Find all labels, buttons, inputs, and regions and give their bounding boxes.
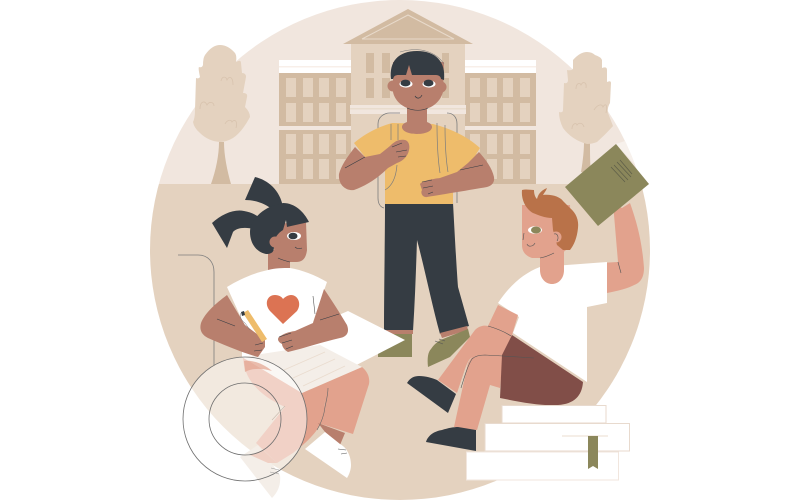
left tree	[193, 45, 250, 184]
neck	[268, 250, 290, 284]
standing boy	[339, 50, 494, 367]
legs and skirt	[243, 350, 369, 478]
back leg	[454, 357, 503, 430]
school building	[279, 9, 536, 184]
left wing	[279, 60, 351, 184]
left arm	[200, 295, 265, 357]
left shoe	[378, 330, 413, 357]
trousers	[384, 203, 469, 334]
backpack outline	[378, 113, 457, 208]
raised arm	[600, 203, 644, 294]
white shoe	[305, 432, 351, 478]
paper	[242, 311, 405, 393]
central block	[343, 9, 473, 184]
illustration: students in front of a school	[150, 0, 650, 500]
bookmark	[588, 436, 598, 469]
book in hand	[565, 144, 649, 226]
background circle with sky and ground	[150, 0, 652, 500]
translucent wheel	[183, 357, 307, 498]
neck and head	[522, 188, 578, 284]
dark shoes	[407, 376, 476, 451]
pencil	[240, 310, 267, 342]
translucent footrest and shoe	[240, 445, 280, 498]
white shirt	[498, 262, 607, 382]
left arm	[339, 140, 409, 190]
head	[250, 203, 309, 262]
right shoe	[428, 326, 470, 367]
girl in wheelchair	[178, 177, 405, 498]
front leg and thigh	[438, 305, 518, 393]
yellow shirt	[354, 123, 480, 204]
wheelchair backrest	[178, 255, 214, 365]
right wing	[465, 60, 536, 184]
head	[388, 50, 446, 110]
right arm	[278, 289, 348, 352]
shorts	[500, 335, 583, 405]
seated boy with red hair	[407, 144, 649, 480]
neck	[402, 100, 432, 134]
hair bun and ponytail	[212, 177, 283, 248]
right tree	[559, 52, 613, 174]
heart	[267, 295, 299, 324]
right arm	[420, 152, 494, 197]
white shirt	[227, 268, 327, 357]
straps	[385, 123, 448, 190]
stacked books	[466, 406, 630, 480]
